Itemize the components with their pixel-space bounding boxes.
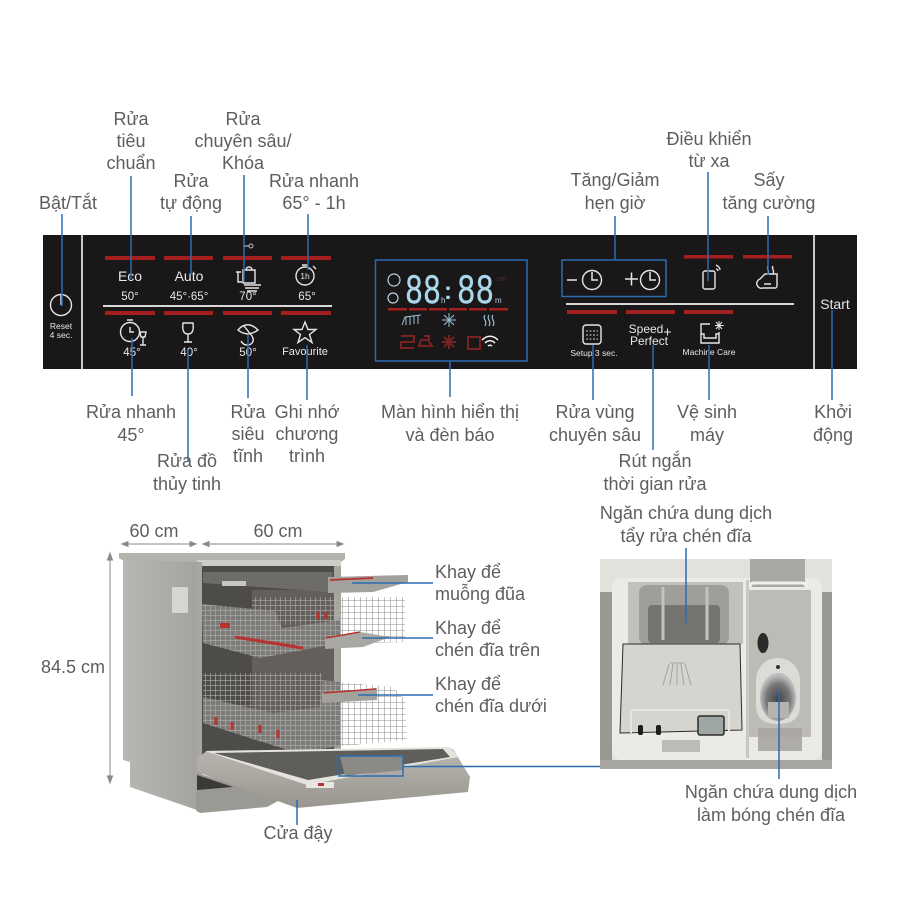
callout lines: control panel <box>62 172 832 462</box>
button: setup zone: Setup 3 sec. <box>570 348 618 358</box>
button: speed perfect: Speed <box>629 322 663 336</box>
label: Rửa nhanh 65° - 1h: 65° - 1h <box>282 193 346 213</box>
lower tray <box>322 688 377 703</box>
label: Rửa tự động: Rửa <box>173 171 210 191</box>
middle tray <box>325 632 390 649</box>
display screen: m <box>495 296 502 305</box>
label: Sấy tăng cường: tăng cường <box>723 193 815 213</box>
label: Rửa chuyên sâu/Khóa: Rửa <box>225 109 262 129</box>
open door <box>197 747 470 808</box>
button: speed perfect: Perfect <box>630 334 669 348</box>
label: Vệ sinh máy: Vệ sinh <box>677 402 737 422</box>
icon: extra dry <box>757 266 777 288</box>
callout lines: dishwasher <box>297 583 600 825</box>
label: Điều khiển từ xa: từ xa <box>688 151 731 171</box>
label: Rửa siêu tĩnh: Rửa <box>230 402 267 422</box>
button: Eco: Eco <box>118 268 142 284</box>
button: quick 45: 45° <box>123 347 141 359</box>
label: Khởi động: Khởi <box>814 402 852 422</box>
label: Rửa nhanh 45°: Rửa nhanh <box>86 402 176 422</box>
lower rack <box>203 673 407 753</box>
button: Eco: 50° <box>121 291 139 303</box>
label: Ngăn chứa dung dịch tẩy rửa chén đĩa: Ngăn chứa dung dịch <box>600 503 772 523</box>
label: Khay để chén đĩa trên: Khay để <box>435 618 501 638</box>
callout lines: dispensers <box>686 548 779 779</box>
label: Cửa đậy: Cửa đậy <box>263 823 333 843</box>
button: quick 45 <box>120 320 146 359</box>
label: Khay để muỗng đũa: Khay để <box>435 562 501 582</box>
button: machine care: Machine Care <box>683 347 736 357</box>
label: Rửa vùng chuyên sâu: chuyên sâu <box>549 425 641 445</box>
button: quick 65 1h <box>296 265 316 303</box>
button: Auto: Auto <box>175 268 204 284</box>
button: silence <box>238 325 258 359</box>
label: Ghi nhớ chương trình: chương <box>276 424 338 444</box>
display screen: 88 <box>405 268 441 316</box>
label: Rửa tự động: tự động <box>160 193 222 213</box>
dimension: depth 60 cm: 60 cm <box>253 521 303 541</box>
label: Sấy tăng cường: Sấy <box>753 170 785 190</box>
display screen: h <box>441 296 445 305</box>
label: Ngăn chứa dung dịch làm bóng chén đĩa: làm bóng chén đĩa <box>697 805 846 825</box>
button: silence: 50° <box>239 347 257 359</box>
label: Rửa tiêu chuẩn: chuẩn <box>106 153 156 173</box>
button: glass: 40° <box>180 347 198 359</box>
top cutlery tray <box>203 572 408 593</box>
label: Vệ sinh máy: máy <box>690 425 724 445</box>
button: start: Start <box>820 296 850 312</box>
label: Khay để muỗng đũa: muỗng đũa <box>435 583 526 604</box>
icon: power button <box>50 294 73 340</box>
label: Khởi động: động <box>813 425 853 445</box>
button: quick 65 1h: 65° <box>298 291 316 303</box>
label: Điều khiển từ xa: Điều khiển <box>666 129 752 149</box>
display screen: : <box>444 278 452 305</box>
button: speed perfect <box>629 322 671 348</box>
upper rack <box>202 597 405 658</box>
icon: remote control <box>703 265 720 289</box>
label: Màn hình hiển thị và đèn báo: Màn hình hiển thị <box>381 402 519 422</box>
button: quick 65 1h: 1h <box>300 271 310 281</box>
icon: power button: 4 sec. <box>50 330 72 340</box>
button: Eco <box>118 268 142 303</box>
button: intensive wash: 70° <box>239 291 257 303</box>
button: intensive wash <box>236 244 261 303</box>
dimension: depth 60 cm <box>203 521 343 546</box>
label: Rửa nhanh 45°: 45° <box>117 425 145 445</box>
label: Khay để chén đĩa trên: chén đĩa trên <box>435 640 540 660</box>
detergent compartment <box>620 582 743 752</box>
label: Ghi nhớ chương trình: trình <box>289 446 325 466</box>
label: Rửa tiêu chuẩn: tiêu <box>116 131 146 151</box>
button: glass <box>180 323 198 359</box>
time delay buttons <box>562 260 666 296</box>
label: Rửa tiêu chuẩn: Rửa <box>113 109 150 129</box>
label: Rửa siêu tĩnh: tĩnh <box>233 446 263 466</box>
icon: power button: Reset <box>50 321 73 331</box>
label: Ngăn chứa dung dịch tẩy rửa chén đĩa: tẩy rửa chén đĩa <box>620 526 753 546</box>
display screen: set <box>497 276 506 283</box>
label: Khay để chén đĩa dưới: Khay để <box>435 674 501 694</box>
dimension: width 60 cm <box>122 521 196 546</box>
button: favourite: Favourite <box>282 346 328 358</box>
dimension: height 84.5 cm: 84.5 cm <box>41 657 105 677</box>
button: Auto <box>170 268 208 303</box>
label: Màn hình hiển thị và đèn báo: và đèn báo <box>405 425 495 445</box>
button: setup zone <box>570 325 618 358</box>
label: Bật/Tắt: Bật/Tắt <box>39 192 97 213</box>
label: Rửa siêu tĩnh: siêu <box>231 424 265 444</box>
label: Rút ngắn thời gian rửa: thời gian rửa <box>604 474 707 494</box>
button: favourite <box>282 322 328 358</box>
display screen: 88 <box>457 268 494 316</box>
label: Ngăn chứa dung dịch làm bóng chén đĩa: Ngăn chứa dung dịch <box>685 782 857 802</box>
label: Rửa chuyên sâu/Khóa: chuyên sâu/ <box>194 131 292 151</box>
label: Ghi nhớ chương trình: Ghi nhớ <box>275 402 340 422</box>
button: machine care <box>683 321 736 357</box>
label: Khay để chén đĩa dưới: chén đĩa dưới <box>435 696 547 716</box>
label: Rửa đồ thủy tinh: thủy tinh <box>153 474 221 494</box>
label: Rửa vùng chuyên sâu: Rửa vùng <box>555 402 635 422</box>
panel: control panel <box>43 235 857 369</box>
display screen <box>376 260 527 361</box>
dimension: height 84.5 cm <box>41 553 112 783</box>
rinse aid compartment <box>749 559 811 751</box>
button: Auto: 45°·65° <box>170 291 208 303</box>
label: Rửa đồ thủy tinh: Rửa đồ <box>157 451 217 471</box>
label: Rửa chuyên sâu/Khóa: Khóa <box>222 153 265 173</box>
label: Rửa nhanh 65° - 1h: Rửa nhanh <box>269 171 359 191</box>
red indicator bars <box>105 255 792 315</box>
label: Tăng/Giảm hẹn giờ: Tăng/Giảm <box>570 170 660 190</box>
dimension: width 60 cm: 60 cm <box>129 521 179 541</box>
illustration: dishwasher <box>119 553 470 813</box>
label: Tăng/Giảm hẹn giờ: hẹn giờ <box>585 193 646 213</box>
photo: detergent dispenser <box>600 559 832 769</box>
label: Rút ngắn thời gian rửa: Rút ngắn <box>618 450 692 471</box>
